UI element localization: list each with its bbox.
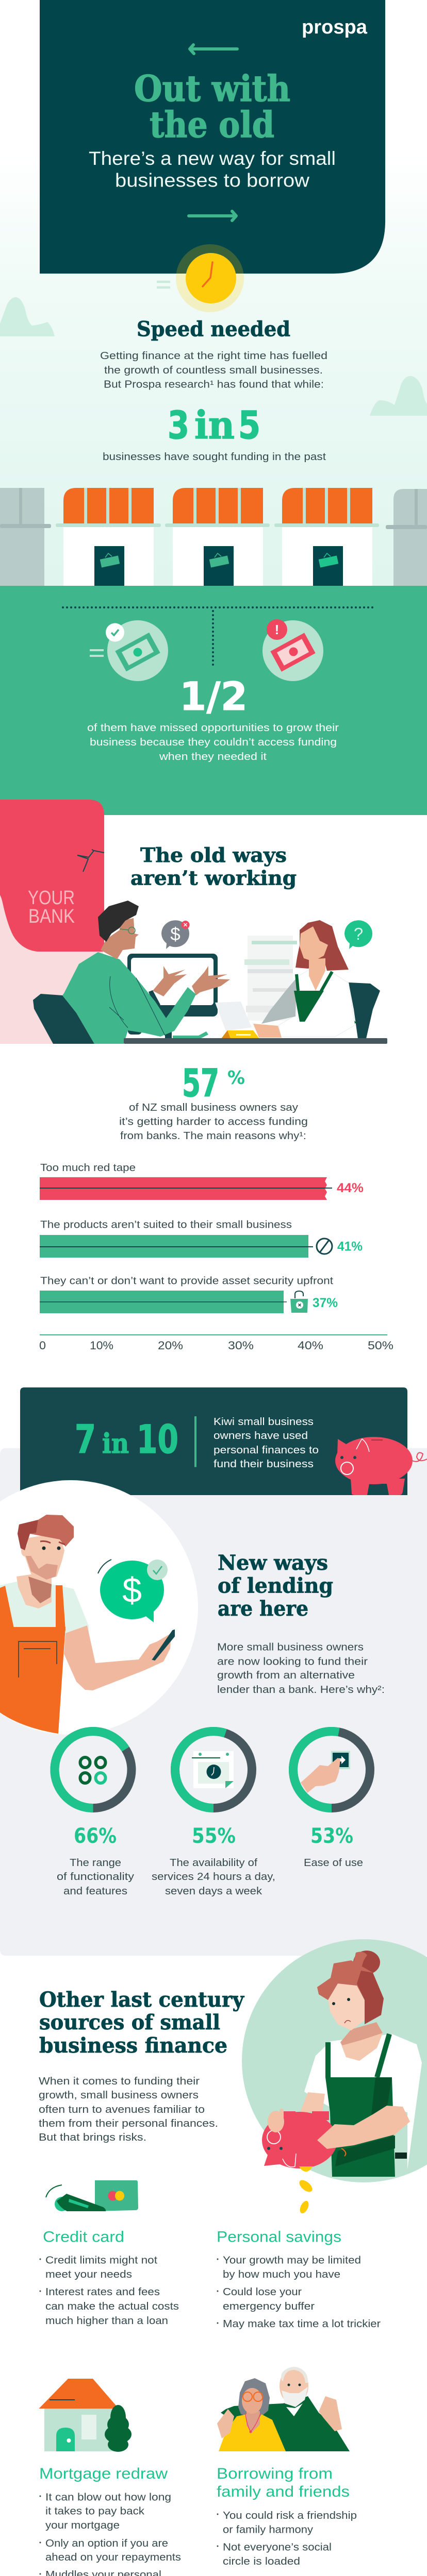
illustration: tradesman with phone: [0, 1480, 198, 1735]
chart axis: 10%: [90, 1339, 113, 1352]
heading: old ways: aren’t working: [130, 867, 297, 889]
icon: credit card: [46, 2180, 138, 2211]
bar: red tape: [40, 1162, 364, 1200]
panel: credit card: meet your needs: [45, 2268, 132, 2280]
text: harder to access funding: [119, 1101, 308, 1142]
desk: [124, 1031, 387, 1044]
stat: 55 percent: seven days a week: [165, 1885, 262, 1897]
bar: unsuitable products: 41%: [337, 1240, 363, 1254]
stat: 53 percent: 53%: [310, 1824, 353, 1848]
panel: credit card: Credit limits might not: [45, 2255, 157, 2266]
heading: new ways of lending: New ways: [218, 1551, 328, 1575]
text: other sources paragraph: [39, 2075, 218, 2143]
stat: 57 percent: 57: [182, 1061, 219, 1106]
shop 1: [56, 488, 161, 586]
text: other sources paragraph: But that brings risks.: [39, 2131, 146, 2143]
stat: 3 in 5: 3: [168, 403, 189, 448]
bar: unsuitable products: [40, 1219, 363, 1258]
title: [134, 68, 290, 146]
heading: old ways: [130, 843, 297, 889]
panel: borrowing from family and friends: [217, 2465, 357, 2567]
chart axis: 50%: [368, 1339, 393, 1352]
stat: 66 percent: [55, 1731, 135, 1897]
text: other sources paragraph: When it comes to funding their: [39, 2075, 200, 2087]
text: businesses sought funding: businesses have sought funding in the past: [103, 451, 326, 463]
text: new lending paragraph: growth from an alternative: [217, 1669, 355, 1681]
heading: other sources: sources of small: [39, 2010, 220, 2035]
panel: missed opportunities: [0, 586, 427, 815]
callout: 7 in 10: [20, 1387, 427, 1495]
text: personal finances: owners have used: [213, 1430, 308, 1442]
text: harder to access funding: it’s getting harder to access funding: [119, 1116, 308, 1127]
text: intro paragraph: Getting finance at the right time has fuelled: [100, 350, 327, 362]
panel: personal savings: by how much you have: [223, 2268, 340, 2280]
stat: 66 percent: of functionality: [57, 1871, 135, 1883]
heading: new ways of lending: are here: [218, 1597, 308, 1621]
text: new lending paragraph: are now looking to fund their: [217, 1656, 368, 1667]
bar: unsuitable products: The products aren’t suited to their small business: [40, 1219, 292, 1230]
monitor: [127, 954, 218, 1039]
heading: other sources: Other last century: [39, 1988, 245, 2012]
bar: asset security: [40, 1275, 338, 1313]
chart axis: 20%: [158, 1339, 183, 1352]
panel: personal savings: Personal savings: [217, 2229, 341, 2245]
subtitle: [89, 148, 336, 191]
text: personal finances: [213, 1416, 319, 1470]
text: other sources paragraph: them from their personal finances.: [39, 2117, 218, 2129]
panel: borrowing from family and friends: Borrowing from: [217, 2465, 333, 2482]
panel: personal savings: Could lose your: [223, 2286, 302, 2298]
stat: 66 percent: 66%: [74, 1824, 117, 1848]
shop 2: [165, 488, 270, 586]
text: intro paragraph: the growth of countless small businesses.: [104, 364, 323, 376]
bar: red tape: 44%: [337, 1181, 364, 1195]
shop 3: [274, 488, 379, 586]
stat: 55 percent: [152, 1731, 275, 1897]
stat: one half: 1/2: [179, 673, 248, 719]
chart axis: 0: [39, 1339, 46, 1352]
title: Out with: [134, 68, 290, 110]
panel: borrowing from family and friends: circle is loaded: [223, 2555, 300, 2567]
icon: clock: [157, 244, 244, 312]
heading: other sources: business finance: [39, 2033, 227, 2058]
panel: borrowing from family and friends: family and friends: [217, 2483, 350, 2500]
panel: personal savings: Your growth may be limited: [223, 2255, 361, 2266]
heading: new ways of lending: [218, 1551, 333, 1621]
chart axis: [39, 1334, 393, 1352]
panel: mortgage redraw: ahead on your repayments: [45, 2551, 181, 2563]
logo: prospa: prospa: [302, 16, 368, 38]
text: harder to access funding: from banks. The main reasons why¹:: [120, 1130, 306, 1142]
text: new lending paragraph: More small business owners: [217, 1641, 364, 1653]
stat: 55 percent: The availability of: [170, 1857, 257, 1869]
bar: asset security: 37%: [313, 1296, 338, 1310]
panel: borrowing from family and friends: or family harmony: [223, 2523, 314, 2536]
stat: 55 percent: services 24 hours a day,: [152, 1871, 275, 1883]
text: harder to access funding: of NZ small business owners say: [129, 1101, 299, 1113]
text: other sources paragraph: growth, small business owners: [39, 2089, 199, 2101]
panel: mortgage redraw: [39, 2465, 181, 2576]
bar chart: [39, 1162, 393, 1352]
text: intro paragraph: [100, 350, 327, 391]
bank sign: BANK: [28, 906, 75, 927]
stat: 57 percent: %: [227, 1067, 245, 1089]
person: customer: [33, 901, 230, 1044]
panel: borrowing from family and friends: You could risk a friendship: [223, 2510, 357, 2521]
panel: credit card: can make the actual costs: [45, 2300, 179, 2312]
text: missed opportunities: business because they couldn’t access funding: [90, 736, 337, 748]
text: missed opportunities: [87, 722, 339, 762]
icon: dollar speech bubble: [161, 920, 190, 949]
panel: personal savings: [217, 2229, 381, 2330]
stat: seven in ten: 7: [75, 1416, 96, 1462]
illustration: bank meeting: [0, 800, 387, 1044]
text: new lending paragraph: lender than a bank. Here’s why²:: [217, 1684, 385, 1696]
text: personal finances: personal finances to: [213, 1444, 319, 1456]
text: personal finances: fund their business: [213, 1458, 314, 1470]
stat: 3 in 5: [168, 403, 260, 448]
arrow: right: [189, 211, 236, 221]
icon: hand pressing button: [301, 1751, 350, 1793]
title: the old: [150, 104, 274, 146]
icon: calendar clock: [192, 1751, 234, 1788]
icon: question speech bubble: ?: [354, 924, 363, 943]
panel: borrowing from family and friends: Not everyone’s social: [223, 2541, 332, 2553]
bar: asset security: They can’t or don’t want to provide asset security upfront: [40, 1275, 333, 1287]
icon: question speech bubble: [344, 920, 372, 949]
text: personal finances: Kiwi small business: [213, 1416, 314, 1428]
stat: 3 in 5: 5: [238, 403, 260, 448]
icon: four rings: [80, 1757, 105, 1783]
stat: seven in ten: [75, 1416, 178, 1462]
stat: 53 percent: [293, 1731, 370, 1869]
illustration: woman with piggy bank: [242, 1939, 427, 2215]
panel: credit card: Interest rates and fees: [45, 2286, 160, 2298]
panel: credit card: Credit card: [43, 2229, 124, 2245]
icon: house: [39, 2379, 132, 2452]
person: bank teller: [215, 920, 380, 1039]
panel: personal savings: emergency buffer: [223, 2300, 315, 2312]
chart axis: 40%: [298, 1339, 323, 1352]
panel: credit card: [39, 2229, 179, 2327]
stat: 55 percent: 55%: [192, 1824, 236, 1848]
hills: [0, 297, 427, 416]
panel: mortgage redraw: your mortgage: [45, 2519, 120, 2531]
stat: seven in ten: 10: [137, 1416, 178, 1462]
panel: new ways of lending background: [0, 1448, 427, 1956]
icon: dollar speech bubble: $: [170, 924, 180, 944]
icon: green banknote: [90, 620, 168, 681]
panel: mortgage redraw: Mortgage redraw: [39, 2465, 168, 2482]
icon: red banknote: [262, 619, 323, 681]
text: missed opportunities: when they needed it: [159, 751, 267, 762]
icon: piggy bank: [335, 1437, 427, 1495]
icon: red banknote: !: [275, 622, 279, 637]
bar: red tape: Too much red tape: [40, 1162, 136, 1174]
illustration: older couple: [217, 2367, 350, 2451]
panel: mortgage redraw: it takes to pay back: [45, 2505, 145, 2517]
paper stack: [244, 936, 297, 1021]
stat: 53 percent: Ease of use: [304, 1857, 363, 1869]
panel: personal savings: May make tax time a lot trickier: [223, 2318, 381, 2330]
stat: seven in ten: in: [102, 1428, 129, 1460]
heading: other sources: [39, 1988, 245, 2058]
panel: mortgage redraw: It can blow out how long: [45, 2492, 171, 2503]
panel: credit card: much higher than a loan: [45, 2315, 168, 2327]
text: intro paragraph: But Prospa research¹ has found that while:: [104, 378, 324, 391]
piggy bank: [262, 2111, 337, 2168]
chart axis: 30%: [228, 1339, 254, 1352]
heading: speed needed: Speed needed: [137, 317, 290, 341]
stat: 66 percent: The range: [70, 1857, 121, 1869]
bank sign: YOUR: [28, 887, 75, 909]
text: missed opportunities: of them have missed opportunities to grow their: [87, 722, 339, 734]
panel: mortgage redraw: Only an option if you are: [45, 2537, 168, 2549]
heading: new ways of lending: of lending: [218, 1573, 333, 1598]
bank sign: [0, 800, 104, 952]
hero panel: [40, 0, 385, 274]
text: new lending paragraph: [217, 1641, 385, 1696]
arrow: left: [190, 45, 237, 54]
stat: 66 percent: and features: [63, 1885, 127, 1897]
icon: dollar speech bubble: [98, 1560, 168, 1622]
subtitle: businesses to borrow: [115, 170, 309, 191]
text: other sources paragraph: often turn to avenues familiar to: [39, 2104, 205, 2115]
stat: 3 in 5: in: [194, 403, 235, 448]
illustration: shopfronts: [0, 488, 427, 586]
icon: dollar speech bubble: $: [122, 1571, 142, 1610]
heading: old ways: The old ways: [140, 843, 287, 867]
coins: [297, 2166, 315, 2215]
subtitle: There’s a new way for small: [89, 148, 336, 169]
